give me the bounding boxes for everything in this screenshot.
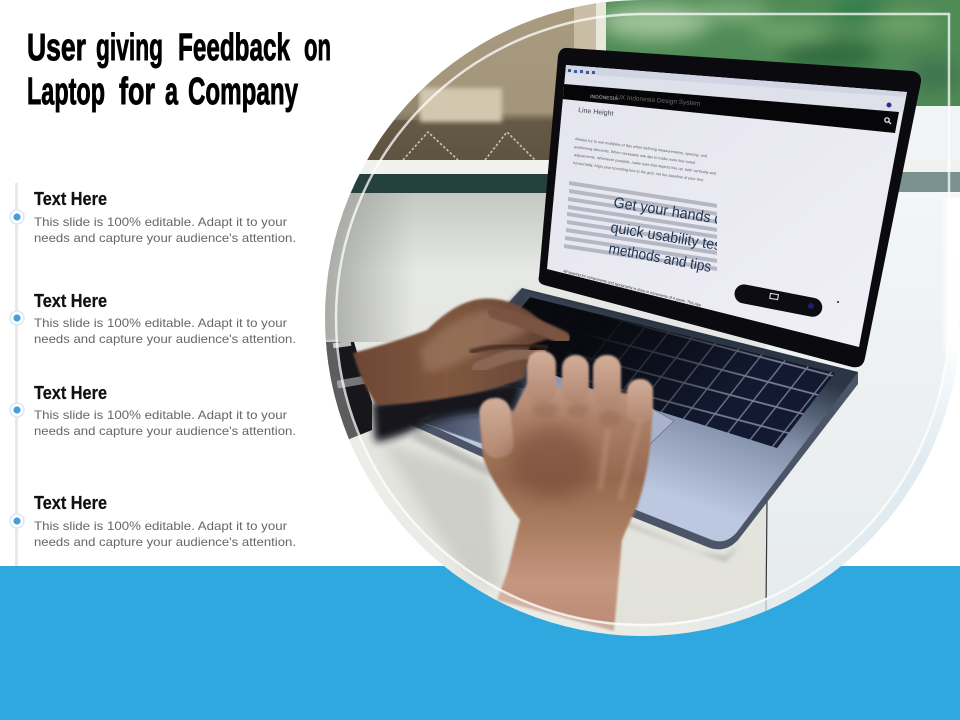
table right side	[766, 190, 960, 640]
line height sample text	[609, 198, 717, 273]
hand dark patch	[510, 426, 594, 498]
body text 1: needs and capture your audience's attention.	[34, 231, 296, 245]
laptop deck	[406, 288, 858, 541]
title: a	[165, 71, 179, 113]
screen paragraph	[573, 137, 716, 182]
list item 2	[10, 291, 296, 346]
screen heading: Line Height	[578, 107, 614, 118]
title	[27, 27, 331, 113]
browser chrome	[565, 65, 907, 112]
list item 4	[10, 493, 296, 549]
body text 3: needs and capture your audience's attention.	[34, 424, 296, 438]
hand shadow	[372, 380, 525, 442]
search icon	[885, 118, 891, 124]
keyboard shade	[520, 297, 774, 420]
title: for	[119, 71, 155, 113]
body text 3	[34, 408, 296, 438]
body text 4	[34, 519, 296, 549]
marker 4	[10, 514, 24, 528]
lower right faded rim	[700, 330, 960, 630]
title: Feedback	[178, 27, 291, 69]
timeline vertical line	[15, 183, 18, 566]
knuckle shading	[532, 402, 621, 426]
left hand	[353, 299, 560, 405]
body text 1	[34, 215, 296, 245]
fingers	[478, 351, 653, 459]
laptop	[400, 48, 921, 549]
watch	[326, 341, 372, 442]
table lower left shading	[380, 440, 500, 590]
body text 4: This slide is 100% editable. Adapt it to your	[34, 519, 287, 533]
table surface	[325, 190, 841, 636]
list item 1	[10, 189, 296, 245]
heading 4: Text Here	[34, 493, 107, 513]
shadow below laptop	[410, 430, 740, 562]
table right edge glow	[945, 192, 960, 352]
decorative inner ring	[336, 14, 949, 625]
screen: UX Indonesia Design System	[616, 94, 701, 108]
tendon highlights	[600, 420, 640, 500]
line height sample text: methods and tips	[607, 240, 713, 276]
title: giving	[96, 27, 163, 69]
marker 1	[10, 210, 24, 224]
line height sample text: quick usability tes	[609, 219, 723, 254]
screen: INDONESIA	[590, 94, 618, 102]
black navigation bar	[562, 84, 899, 133]
heading 1: Text Here	[34, 189, 107, 209]
floating toolbar pill	[734, 284, 822, 317]
window sill	[340, 160, 960, 198]
hand shape	[480, 385, 652, 631]
title: Laptop	[27, 71, 105, 113]
table left shading	[325, 192, 404, 342]
screen	[547, 65, 907, 347]
blue footer band	[0, 566, 960, 720]
marker 3	[10, 403, 24, 417]
dark area at left deck	[503, 288, 528, 388]
screen paragraph: adjustments. Whenever possible, make sure that objects line up, both vertically and	[574, 153, 716, 176]
body text 2: This slide is 100% editable. Adapt it to your	[34, 316, 287, 330]
right hand	[478, 351, 653, 631]
left hand and watch	[326, 299, 563, 442]
screen caption: All spacing for components and typography is done in increments of 4 pixels. This App	[563, 269, 702, 307]
timeline list	[10, 183, 296, 566]
line height sample text: Get your hands d	[612, 194, 724, 228]
heading 2: Text Here	[34, 291, 107, 311]
left hand knuckle highlight	[420, 310, 530, 372]
body text 1: This slide is 100% editable. Adapt it to your	[34, 215, 287, 229]
lower left faded rim	[325, 340, 700, 635]
table seam	[766, 500, 767, 612]
body text 4: needs and capture your audience's attention.	[34, 535, 296, 549]
title: on	[304, 27, 331, 69]
title: User	[27, 27, 86, 69]
left hand lower finger	[478, 352, 540, 368]
laptop base edge	[411, 368, 858, 550]
screen paragraph: Always try to use multiples of 8px when defining measurements, spacing, and	[575, 137, 707, 158]
screen paragraph: horizontally. Align your bounding box to the grid, not the baseline of your text.	[573, 161, 704, 182]
line height stripes	[564, 181, 718, 271]
curtain	[367, 4, 596, 160]
list item 3	[10, 383, 296, 438]
heading 3: Text Here	[34, 383, 107, 403]
body text 2	[34, 316, 296, 346]
screen paragraph: positioning elements. When necessary use 4px to make more fine-tuned	[574, 145, 695, 165]
left hand finger gap	[470, 345, 548, 352]
left hand upper finger	[495, 312, 563, 338]
window view with greenery	[596, 0, 960, 174]
body text 2: needs and capture your audience's attention.	[34, 332, 296, 346]
body text 3: This slide is 100% editable. Adapt it to your	[34, 408, 287, 422]
marker 2	[10, 311, 24, 325]
keyboard	[490, 297, 835, 448]
trackpad	[421, 385, 674, 446]
circular photo: hands typing on laptop	[320, 0, 960, 640]
screen bezel	[539, 48, 921, 367]
title: Company	[188, 71, 298, 113]
